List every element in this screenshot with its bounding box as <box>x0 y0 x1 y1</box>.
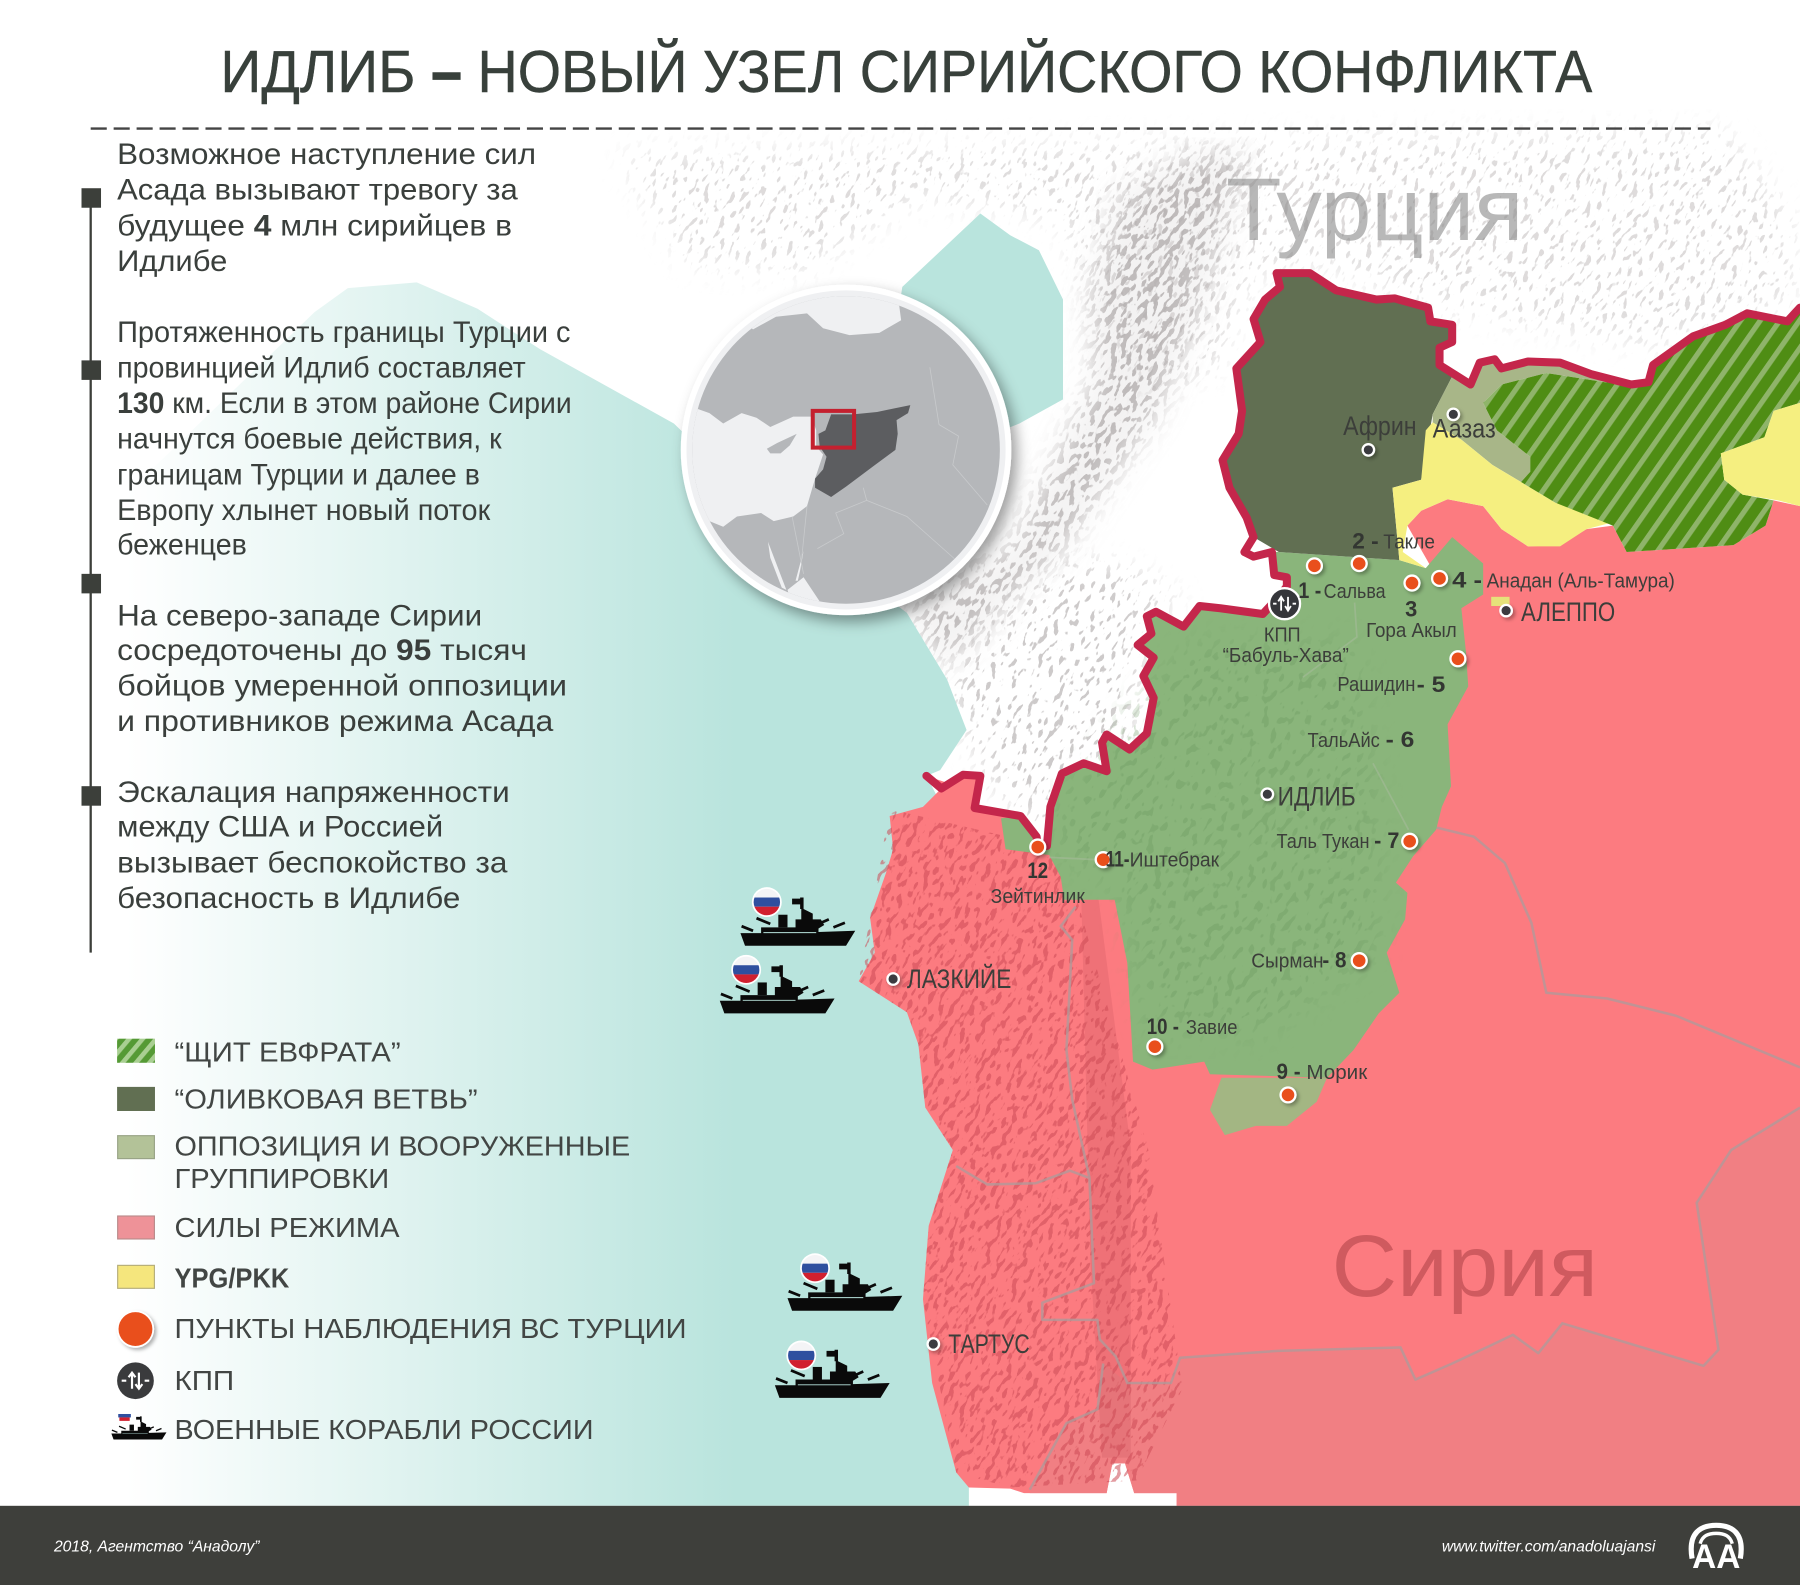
text block 3: сосредоточены до 95 тысяч <box>117 634 527 667</box>
text block 3: бойцов умеренной оппозиции <box>117 670 567 703</box>
sea <box>115 282 987 1506</box>
legend <box>111 1037 686 1445</box>
map labels: КПП <box>1264 624 1301 647</box>
text block 1: будущее 4 млн сирийцев в <box>117 209 512 242</box>
legend: Euphrates Shield: “ЩИТ ЕВФРАТА” <box>174 1037 401 1068</box>
map labels: 1 - <box>1298 578 1321 603</box>
map labels: Анадан (Аль-Тамура) <box>1487 570 1675 593</box>
text block 1: Возможное наступление сил <box>117 138 536 171</box>
text block 4: безопасность в Идлибе <box>117 882 460 915</box>
Syria <box>815 405 910 497</box>
Aleppo spot <box>1491 597 1510 606</box>
locator rectangle <box>813 411 854 448</box>
map labels: - 7 <box>1374 828 1399 853</box>
Latakia internal line <box>956 1166 1088 1184</box>
text block 2: беженцев <box>117 528 247 561</box>
map labels: 12 <box>1027 858 1048 883</box>
mountain relief: wide <box>626 124 1800 394</box>
map labels: - 8 <box>1322 948 1347 973</box>
Turkish border west <box>926 775 1038 847</box>
map labels: 11- <box>1105 847 1130 872</box>
legend: opposition <box>118 1131 630 1194</box>
Afrin Olive Branch area <box>1223 273 1452 560</box>
text block 2: Европу хлынет новый поток <box>117 494 491 527</box>
ship 1 <box>740 887 855 946</box>
country label: Turkey: Турция <box>1226 159 1523 259</box>
map labels: Морик <box>1306 1061 1368 1084</box>
text block 3 <box>117 600 567 738</box>
text block 2: начнутся боевые действия, к <box>117 423 503 456</box>
ship 3 <box>788 1253 902 1311</box>
text block 4: между США и Россией <box>117 811 443 844</box>
text block 2: 130 км. Если в этом районе Сирии <box>117 387 572 420</box>
locator globe <box>677 275 1011 615</box>
text block 2 <box>117 316 572 561</box>
legend: checkpoint: КПП <box>174 1365 234 1396</box>
text block 2: провинцией Идлиб составляет <box>117 352 526 385</box>
map labels: 4 - <box>1452 568 1482 593</box>
map labels: Сырман <box>1251 950 1324 973</box>
map labels: ТальАйс <box>1308 729 1380 752</box>
observation points <box>1030 556 1465 1102</box>
map labels: Такле <box>1383 531 1435 554</box>
text block 4: Эскалация напряженности <box>117 776 510 809</box>
map labels: 3 <box>1405 596 1417 621</box>
map labels: - 6 <box>1386 727 1414 752</box>
map labels: Завие <box>1186 1016 1237 1039</box>
map labels: АЛЕППО <box>1521 597 1615 627</box>
timeline <box>82 188 101 953</box>
legend: Russian warships: ВОЕННЫЕ КОРАБЛИ РОССИИ <box>174 1414 593 1445</box>
title: – <box>432 38 461 105</box>
map labels: Зейтинлик <box>991 885 1086 908</box>
agency logo: AA <box>1692 1538 1740 1576</box>
checkpoint icon <box>1269 588 1300 619</box>
map labels <box>907 411 1675 1359</box>
map labels: Аазаз <box>1433 413 1496 443</box>
text block 3: На северо-западе Сирии <box>117 600 482 633</box>
Mediterranean Sea <box>692 409 823 527</box>
Red Sea gulfs <box>768 542 820 606</box>
text block 2: Протяженность границы Турции с <box>117 316 571 349</box>
map labels: - 5 <box>1417 672 1445 697</box>
relief on regime area <box>855 803 1194 1498</box>
borders inside regime area <box>1436 828 1800 1067</box>
legend: opposition: ГРУППИРОВКИ <box>174 1163 389 1194</box>
YPG area east <box>1721 403 1800 506</box>
map labels: 2 - <box>1352 529 1379 554</box>
lower internal line <box>1030 1363 1103 1490</box>
legend: Olive Branch: “ОЛИВКОВАЯ ВЕТВЬ” <box>174 1084 478 1115</box>
legend: opposition: ОППОЗИЦИЯ И ВООРУЖЕННЫЕ <box>174 1131 630 1162</box>
opposition patch south <box>1210 1078 1327 1135</box>
city dots <box>887 409 1512 1350</box>
light lines in Idlib <box>1049 603 1409 860</box>
green relief <box>1051 651 1368 1024</box>
legend: YPG/PKK <box>118 1263 289 1294</box>
map labels: 10 - <box>1147 1014 1179 1039</box>
YPG area west <box>1392 422 1613 568</box>
map labels: ИДЛИБ <box>1278 782 1356 812</box>
mountain relief: dense band <box>895 138 1263 689</box>
legend: YPG/PKK: YPG/PKK <box>174 1263 289 1294</box>
map labels: Иштебрак <box>1130 849 1220 872</box>
title: НОВЫЙ УЗЕЛ СИРИЙСКОГО КОНФЛИКТА <box>478 38 1592 105</box>
Euphrates Shield area <box>1483 308 1800 552</box>
Idlib opposition area <box>1001 537 1483 1078</box>
title: ИДЛИБ <box>220 38 416 105</box>
Cyprus <box>767 434 797 453</box>
regime territory <box>859 499 1800 1506</box>
text block 4: вызывает беспокойство за <box>117 846 508 879</box>
legend: observation points: ПУНКТЫ НАБЛЮДЕНИЯ ВС ТУРЦИИ <box>174 1313 686 1344</box>
neighbour borders <box>792 367 987 574</box>
text block 4 <box>117 776 510 915</box>
ship 2 <box>720 955 835 1013</box>
map labels: Таль Тукан <box>1277 830 1370 853</box>
text block 1: Идлибе <box>117 245 227 278</box>
country label: Syria: Сирия <box>1332 1218 1598 1315</box>
footer <box>0 1506 1800 1585</box>
map labels: Африн <box>1343 411 1417 441</box>
map labels: 9 - <box>1277 1059 1301 1084</box>
text block 2: границам Турции и далее в <box>117 458 480 491</box>
footer credit: 2018, Агентство “Анадолу” <box>53 1538 260 1556</box>
legend: regime forces: СИЛЫ РЕЖИМА <box>174 1212 400 1243</box>
legend: checkpoint <box>117 1362 234 1399</box>
mountain band on coast <box>1081 900 1131 1458</box>
western internal line <box>1042 907 1800 1383</box>
map labels: Рашидин <box>1337 673 1415 696</box>
ship 4 <box>775 1341 890 1398</box>
coastal relief <box>944 550 1180 830</box>
text block 1 <box>117 138 536 278</box>
footer link: www.twitter.com/anadoluajansi <box>1442 1538 1656 1556</box>
map labels: “Бабуль-Хава” <box>1223 644 1349 667</box>
map labels: Гора Акыл <box>1366 619 1457 642</box>
gulf of Iskenderun <box>895 213 1063 436</box>
Turkish border north <box>1047 273 1800 846</box>
southern duller area <box>1030 1108 1800 1506</box>
map labels: ЛАЗКИЙЕ <box>907 964 1011 994</box>
map labels: Сальва <box>1324 580 1386 603</box>
Black Sea <box>752 296 901 336</box>
text block 1: Асада вызывают тревогу за <box>117 174 518 207</box>
opposition area north <box>1433 359 1631 482</box>
map labels: ТАРТУС <box>948 1329 1030 1359</box>
text block 3: и противников режима Асада <box>117 705 554 738</box>
